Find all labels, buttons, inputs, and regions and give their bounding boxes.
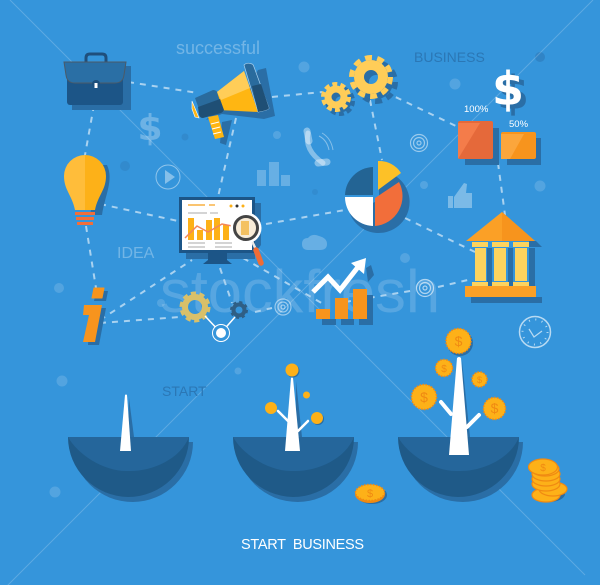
icon: amber cylinder (501, 132, 541, 165)
icon: dollar sign: $ (497, 66, 529, 120)
bowl 3 with money tree: $ (491, 400, 499, 416)
icon: thumbs up (448, 183, 472, 208)
chart: growth bars with arrow (313, 258, 374, 325)
coin on ground (355, 484, 387, 504)
icon: dark gear (232, 302, 246, 318)
icon: phone (307, 131, 333, 163)
icon: target (410, 134, 428, 152)
bowl 3 with money tree: $ (420, 389, 428, 405)
chart: pie (345, 161, 410, 233)
bowl 3 with money tree: $ (441, 364, 447, 375)
icon: faded dollar: $ (137, 108, 163, 149)
icon: faded bars (257, 162, 290, 186)
icon: bank (465, 212, 542, 303)
dashed connectors (85, 82, 505, 323)
icon: clock (520, 316, 550, 348)
coin stack (528, 459, 567, 502)
icon: target small (275, 299, 291, 315)
coins on money tree (412, 328, 506, 420)
icon: magnifier (230, 212, 262, 263)
icon: cloud (302, 235, 327, 250)
heading: IDEA: IDEA (117, 245, 155, 262)
bowl 1 with sprout (68, 394, 193, 502)
icon: monitor with chart (179, 197, 262, 264)
coin stack: $ (540, 463, 546, 474)
label: 100%: 100% (464, 104, 489, 115)
bowl 3 with money tree: $ (455, 333, 463, 349)
bowl 3 with money tree (398, 328, 523, 502)
coins on small tree (265, 364, 324, 425)
title: START BUSINESS: START BUSINESS (241, 537, 364, 553)
icon: large gear (352, 58, 396, 102)
icon: gold gear (182, 294, 208, 320)
icon: small gear (323, 84, 353, 114)
watermark text: stockfresh (160, 258, 440, 325)
icon: network node (205, 316, 235, 342)
coin on ground: $ (367, 488, 373, 500)
icon: dollar sign: $ (492, 62, 524, 116)
icon: light bulb (64, 155, 110, 225)
bowl 2 with small tree (233, 364, 358, 502)
bowl 3 with money tree: $ (477, 375, 482, 385)
heading: BUSINESS: BUSINESS (414, 49, 485, 65)
icon: play button (156, 165, 180, 189)
icon: info letter i (83, 288, 108, 345)
heading: START: START (162, 383, 207, 399)
label: 50%: 50% (509, 119, 529, 130)
background dots (50, 52, 546, 498)
icon: megaphone (192, 63, 275, 145)
heading: successful: successful (176, 38, 260, 58)
icon: briefcase (64, 54, 131, 110)
icon: target right (416, 280, 434, 296)
icon: orange cylinder (458, 121, 499, 165)
